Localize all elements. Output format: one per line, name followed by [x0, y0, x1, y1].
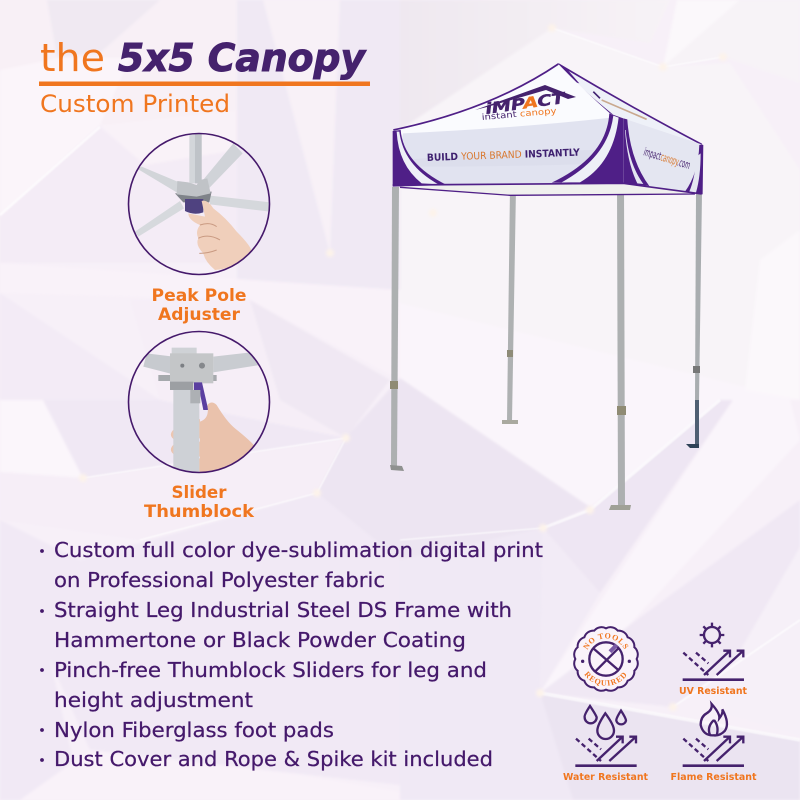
- feature bullet list: Straight Leg Industrial Steel DS Frame with: [54, 598, 512, 622]
- underside: [400, 183, 697, 195]
- feature bullet list: Hammertone or Black Powder Coating: [54, 628, 466, 652]
- subtitle: Custom Printed: [40, 90, 230, 118]
- label: slider thumblock: Slider: [172, 483, 227, 503]
- label: peak pole adjuster: Adjuster: [158, 305, 241, 325]
- icon: water resistant: [575, 706, 637, 766]
- label: slider thumblock: [144, 483, 255, 522]
- canopy tent photo: [390, 63, 703, 510]
- icon: no tools required badge: NO TOOLS: [583, 633, 628, 650]
- label: flame resistant: Flame Resistant: [670, 772, 757, 783]
- label: water resistant: Water Resistant: [563, 772, 648, 783]
- label: slider thumblock: Thumblock: [144, 502, 255, 522]
- label: UV resistant: UV Resistant: [679, 686, 747, 697]
- front roof and valance: [393, 64, 623, 187]
- title: 5x5 Canopy: [118, 36, 367, 80]
- title underline: [39, 82, 370, 86]
- label: peak pole adjuster: [152, 286, 246, 325]
- legs: [390, 183, 702, 510]
- canopy side url: impactcanopy.com: [642, 145, 692, 172]
- canopy logo: iMP ACT: [484, 89, 568, 118]
- side roof: [558, 64, 702, 144]
- photo: slider thumblock: [128, 332, 270, 473]
- feature bullet list: on Professional Polyester fabric: [54, 568, 385, 592]
- label: peak pole adjuster: Peak Pole: [152, 286, 246, 306]
- feature bullet list: Dust Cover and Rope & Spike kit included: [54, 747, 493, 771]
- photo: peak pole adjuster: [128, 132, 270, 274]
- feature bullet list: [40, 538, 543, 771]
- feature bullet list: Custom full color dye-sublimation digital print: [54, 538, 543, 562]
- canopy logo: instant canopy: [481, 106, 557, 123]
- icon: no tools required badge: [573, 626, 639, 692]
- feature bullet list: height adjustment: [54, 688, 253, 712]
- feature bullet list: Nylon Fiberglass foot pads: [54, 718, 334, 742]
- side valance: [623, 118, 702, 194]
- feature bullet list: Pinch-free Thumblock Sliders for leg and: [54, 658, 487, 682]
- canopy slogan: BUILD YOUR BRAND INSTANTLY: [427, 148, 581, 164]
- canopy logo: [475, 85, 576, 123]
- icon: flame resistant: [683, 704, 744, 766]
- icon: UV resistant: [683, 623, 744, 680]
- title: the: [40, 36, 105, 80]
- icon: no tools required badge: REQUIRED: [584, 671, 626, 686]
